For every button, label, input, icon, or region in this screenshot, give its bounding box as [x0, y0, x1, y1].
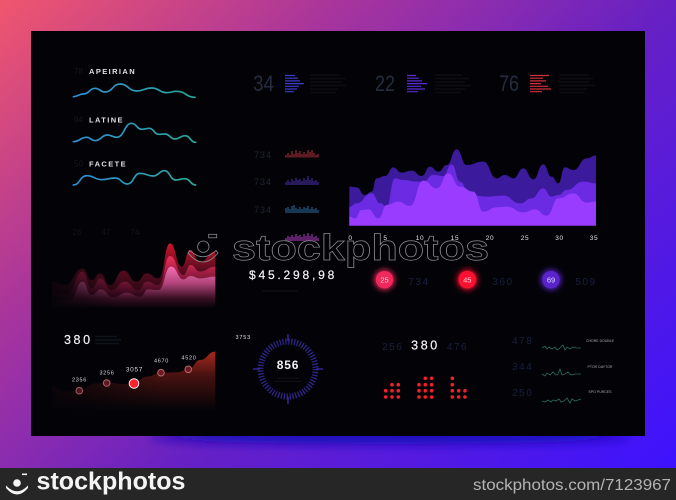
bars: blue [285, 76, 304, 92]
panel: top statistics [253, 71, 595, 96]
caption: Spo Purces: SPO PURCES [589, 390, 612, 394]
bars: red [530, 76, 551, 92]
watermark text: stockphotos [232, 227, 489, 268]
tick 0: 0 [348, 235, 353, 242]
mini bars: pink [286, 233, 318, 241]
value: 734 violet row: 734 [254, 177, 272, 187]
faint stats [73, 228, 140, 237]
point 3057 [129, 379, 139, 388]
left fade [52, 370, 162, 412]
bars: violet [407, 76, 427, 92]
panel: line chart 380 [52, 333, 215, 412]
label 2356: 2356 [72, 378, 87, 384]
wave line: Facete [73, 171, 196, 185]
panel: mini bar charts [254, 150, 318, 241]
layer: pink [52, 267, 215, 308]
tick 25: 25 [521, 235, 529, 242]
value: 94: 94 [74, 116, 83, 124]
caption block 2 [435, 75, 471, 92]
label: Facete: FACETE [89, 160, 127, 168]
mini bars: red [286, 150, 318, 158]
panel: wave lines [73, 67, 196, 185]
footer url: stockphotos.com/7123967 [473, 477, 671, 494]
heading value 380: 380 [64, 333, 93, 347]
balance amount: $45.298,98 [249, 268, 337, 282]
caption: Ptor Daytor: PTOR DAYTOR [588, 365, 613, 369]
indicator: 45 [457, 270, 477, 290]
label 3256: 3256 [99, 371, 115, 377]
stat 74: 74 [131, 228, 140, 237]
dot columns: left [384, 383, 400, 399]
panel: red area chart [52, 228, 215, 310]
pulse 3 [542, 398, 581, 403]
left fade [52, 260, 122, 310]
dot columns: centre [417, 376, 434, 399]
layer: bright purple [349, 173, 596, 226]
panel: balance [249, 268, 337, 291]
value: 734 red row: 734 [254, 150, 272, 160]
value: 509: 509 [575, 277, 597, 288]
tick 35: 35 [590, 235, 598, 242]
pulse lines [542, 345, 581, 403]
label: Apeirian: APEIRIAN [89, 67, 136, 76]
point 4520 [185, 366, 192, 373]
data points [76, 366, 192, 394]
area chart: violet layers [349, 149, 596, 226]
gauge caption [275, 378, 301, 382]
stat number: 34: 34 [253, 71, 274, 96]
value 256: 256 [382, 342, 403, 353]
value 476: 476 [447, 342, 468, 353]
axis labels [348, 235, 598, 242]
dot columns: right [450, 376, 467, 399]
point 2356 [76, 387, 83, 394]
footer logo text: stockphotos [36, 468, 186, 496]
stat 26: 26 [73, 228, 82, 237]
stat 47: 47 [102, 228, 111, 237]
panel: radial gauge [236, 334, 323, 404]
point labels [72, 355, 197, 384]
value 478: 478 [512, 336, 533, 347]
footer logo icon [6, 474, 28, 494]
value: 50: 50 [74, 160, 83, 168]
label 4520: 4520 [181, 355, 197, 361]
stat number: 22: 22 [375, 71, 395, 96]
value 250: 250 [512, 388, 533, 399]
tick 10: 10 [416, 235, 424, 242]
layer: crimson [52, 256, 215, 308]
dashboard panel [31, 31, 645, 436]
label 3057: 3057 [126, 366, 143, 373]
caption: Chore Double: CHORE DOUBLE [586, 339, 615, 343]
wave line: Apeirian [73, 84, 195, 97]
value: 734 blue row: 734 [254, 205, 272, 215]
indicator: 69: 69 [547, 276, 555, 284]
value 3753: 3753 [236, 335, 251, 341]
layer: dark indigo [349, 149, 596, 226]
panel shadow [150, 430, 630, 444]
value 380: 380 [411, 338, 440, 352]
gauge value 856: 856 [277, 358, 299, 372]
tick 15: 15 [451, 235, 459, 242]
pulse 2 [542, 369, 581, 376]
label: Latine: LATINE [89, 116, 124, 124]
wave line: Latine [73, 123, 196, 142]
point 3256 [103, 380, 110, 386]
stat number: 76: 76 [499, 71, 519, 96]
caption [95, 336, 121, 344]
watermark [188, 227, 489, 268]
indicator: 45: 45 [463, 276, 471, 284]
caption block 3 [559, 75, 595, 92]
value: 78: 78 [74, 67, 83, 76]
panel: round indicators [374, 270, 597, 290]
indicator: 25 [374, 270, 394, 290]
indicator: 25: 25 [380, 276, 389, 284]
mini bars: violet [286, 176, 318, 185]
indicator: 69 [541, 270, 561, 290]
radial ticks [253, 334, 323, 404]
point 4670 [158, 369, 164, 376]
pulse 1 [542, 345, 581, 350]
value: 734: 734 [408, 277, 430, 288]
caption block 1 [310, 75, 346, 92]
red area [52, 352, 215, 412]
mini bars: blue [286, 205, 318, 213]
balance caption [262, 290, 298, 292]
tick 30: 30 [555, 235, 564, 242]
value 344: 344 [512, 362, 533, 373]
layer: violet [349, 164, 596, 226]
layer: dark red [52, 243, 215, 308]
tick 20: 20 [486, 235, 494, 242]
watermark icon [188, 234, 218, 262]
tick 5: 5 [383, 235, 388, 242]
panel: dot matrix [382, 338, 468, 399]
red layers [52, 243, 215, 308]
label 4670: 4670 [154, 359, 169, 365]
value: 360: 360 [492, 277, 514, 288]
panel: pulse lines [512, 336, 615, 403]
footer bar [0, 468, 676, 500]
